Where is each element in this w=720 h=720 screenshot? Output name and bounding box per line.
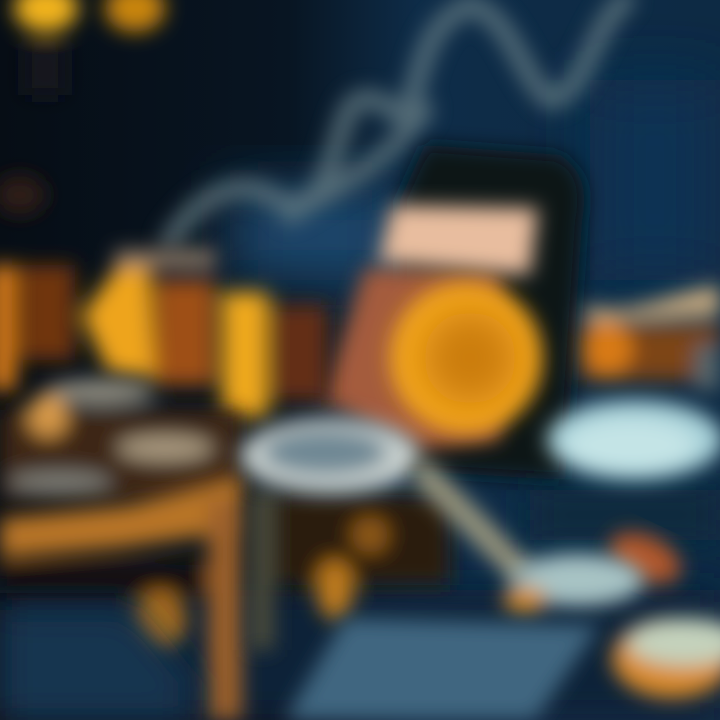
centre plate	[240, 418, 420, 494]
smartphone body	[400, 145, 584, 480]
copper panel	[322, 268, 500, 450]
blue mat	[285, 618, 600, 720]
navy carpet	[0, 610, 190, 720]
gold coin	[390, 282, 542, 434]
coin piles on table	[0, 379, 240, 500]
right pale plate	[547, 400, 720, 480]
magnifier handle	[425, 475, 520, 570]
table legs and coins	[250, 490, 450, 650]
ceiling lights	[0, 0, 165, 215]
corner dish	[612, 618, 720, 698]
gold bars	[0, 250, 328, 417]
smoke trend line	[170, 0, 625, 240]
wooden table	[0, 475, 245, 720]
right dark base	[530, 490, 720, 540]
phone screen	[378, 205, 538, 275]
lower pale dish	[503, 554, 644, 614]
right side gold stack	[580, 285, 720, 390]
orange capsule	[601, 522, 689, 594]
